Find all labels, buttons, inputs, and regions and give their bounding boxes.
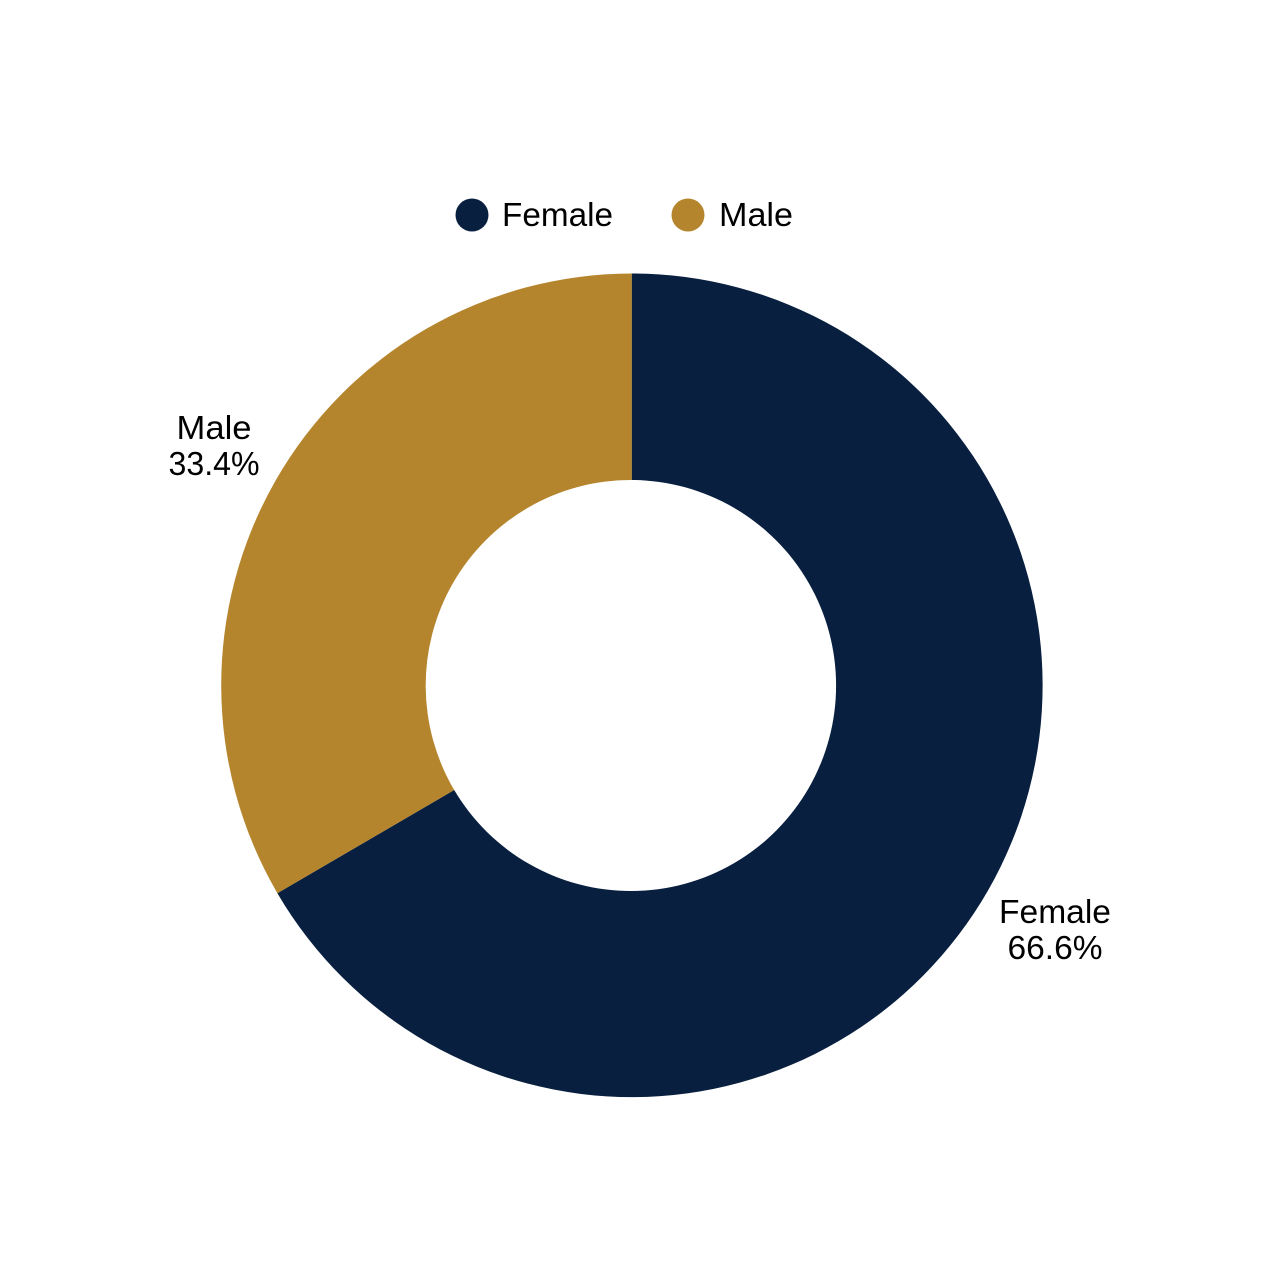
segment: Female 66.6% — [277, 273, 1043, 1097]
legend item: Male: Male — [719, 196, 793, 233]
legend — [456, 196, 793, 233]
segment: Male 33.4% — [221, 274, 632, 893]
data label: Female 66.6%: Female — [999, 893, 1111, 930]
data label: Male 33.4% — [168, 409, 260, 482]
data label: Male 33.4%: 33.4% — [168, 445, 260, 482]
data label: Female 66.6% — [999, 893, 1111, 966]
data label: Female 66.6%: 66.6% — [1008, 929, 1102, 966]
legend item: Female — [456, 196, 613, 233]
legend item: Male — [672, 196, 793, 233]
data label: Male 33.4%: Male — [176, 409, 252, 446]
donut chart — [221, 273, 1043, 1097]
legend item: Female: Female — [502, 196, 613, 233]
